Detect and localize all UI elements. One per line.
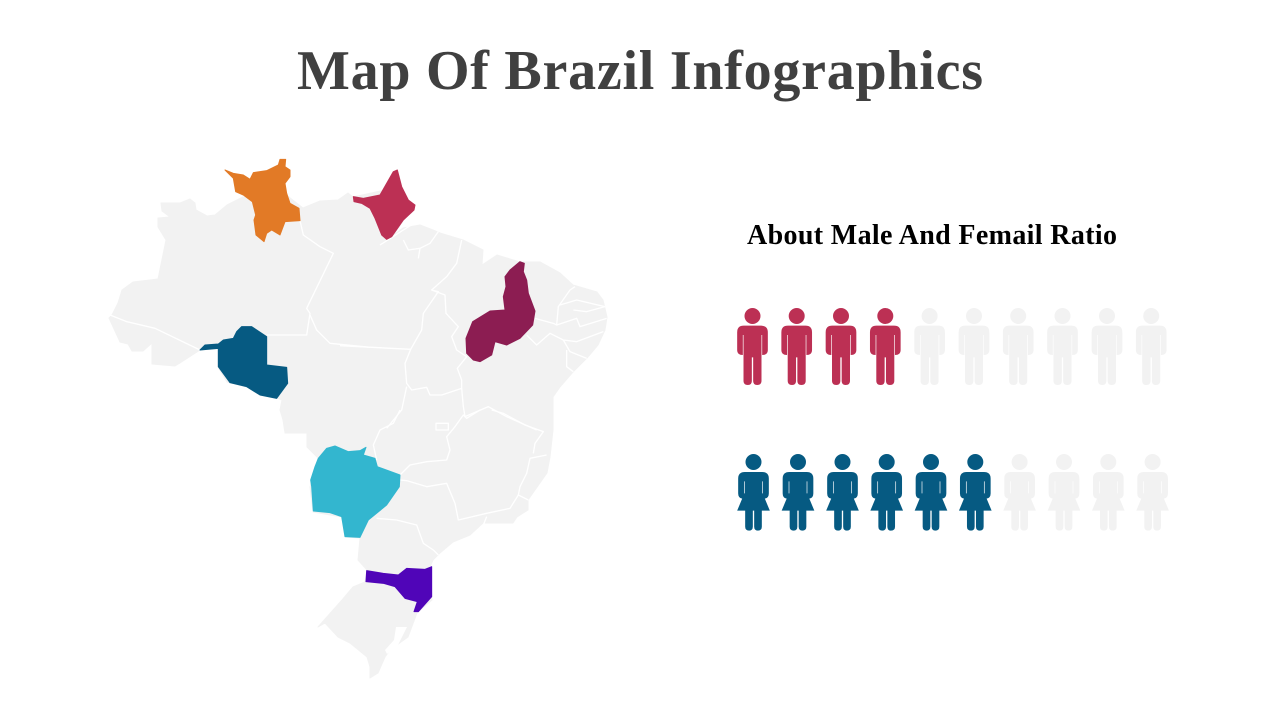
map of Brazil [109, 159, 607, 678]
state: teal (Mato Grosso do Sul) [311, 446, 400, 537]
state: navy (Rondonia) [200, 327, 288, 398]
title: Map Of Brazil Infographics [297, 40, 983, 102]
state: crimson (Amapa) [353, 170, 415, 239]
state borders [110, 221, 607, 555]
state: orange (Roraima) [225, 159, 300, 242]
female icon row [737, 454, 1169, 531]
base map silhouette [109, 190, 607, 678]
state: plum (Piaui) [466, 262, 535, 362]
male icon row [737, 308, 1167, 385]
state: purple (Santa Catarina) [366, 567, 432, 612]
lagoon [385, 627, 407, 654]
subtitle: About Male And Femail Ratio [747, 220, 1117, 251]
